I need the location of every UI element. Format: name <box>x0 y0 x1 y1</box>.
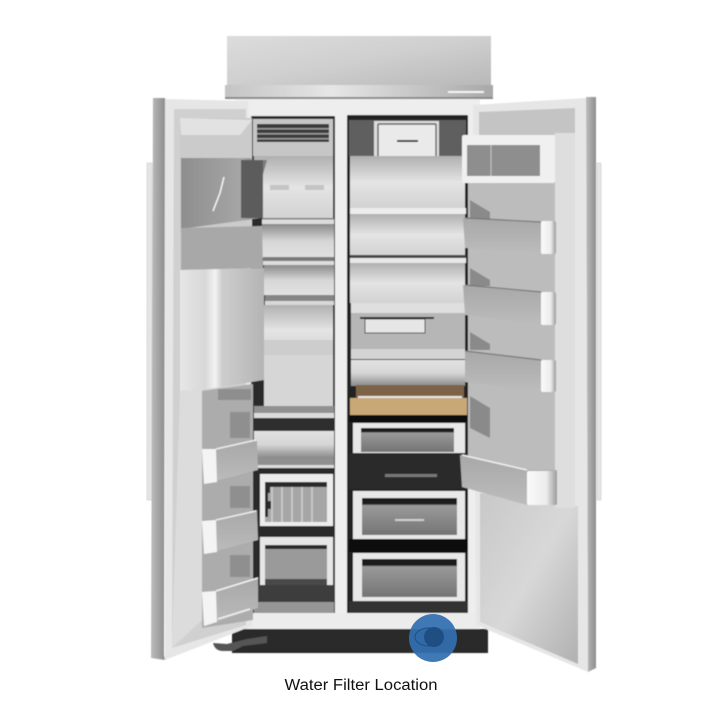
appliance artwork <box>147 36 601 672</box>
drawer two <box>353 491 465 539</box>
ledge <box>180 118 252 135</box>
upper wall <box>254 156 333 218</box>
rack brackets <box>470 200 490 438</box>
left door <box>151 98 267 660</box>
filter cap <box>424 627 444 647</box>
freezer compartment <box>251 116 335 614</box>
door bin brackets <box>230 412 250 577</box>
refrigerator compartment <box>347 115 468 615</box>
dispenser panel <box>180 268 264 391</box>
lower bin recess <box>202 384 253 628</box>
upper recess <box>180 118 252 233</box>
top band and camera housing <box>349 120 466 157</box>
inner rack panel <box>555 133 575 508</box>
right door <box>460 97 596 672</box>
door edge <box>151 98 165 660</box>
drawer one <box>353 423 465 453</box>
door liner <box>473 98 588 672</box>
door bin three <box>202 578 258 626</box>
crisper drawer <box>351 313 465 349</box>
door liner <box>165 99 252 660</box>
caption: Water Filter Location <box>284 677 438 694</box>
lower door panel <box>480 493 578 664</box>
water filter highlight <box>409 614 457 662</box>
door shelf three <box>465 351 556 392</box>
bottom strip and kick plate <box>213 613 488 653</box>
door shelf four <box>460 455 557 505</box>
freezer bin upper <box>260 474 333 526</box>
dispenser grey block <box>181 226 263 270</box>
side filler strips <box>147 163 601 500</box>
wood drawer <box>350 385 467 415</box>
door shelf two <box>463 285 556 325</box>
cabinet body <box>235 99 480 629</box>
door edge <box>586 97 596 672</box>
shelves <box>254 218 334 468</box>
vent unit <box>253 119 333 156</box>
top dairy bin <box>462 135 555 183</box>
door bin one <box>202 440 258 484</box>
top grille box <box>225 36 493 99</box>
ice bin <box>181 158 267 229</box>
freezer bin lower <box>260 537 333 585</box>
drawer three <box>353 553 465 601</box>
door shelf one <box>463 218 556 254</box>
door bin two <box>202 510 258 554</box>
